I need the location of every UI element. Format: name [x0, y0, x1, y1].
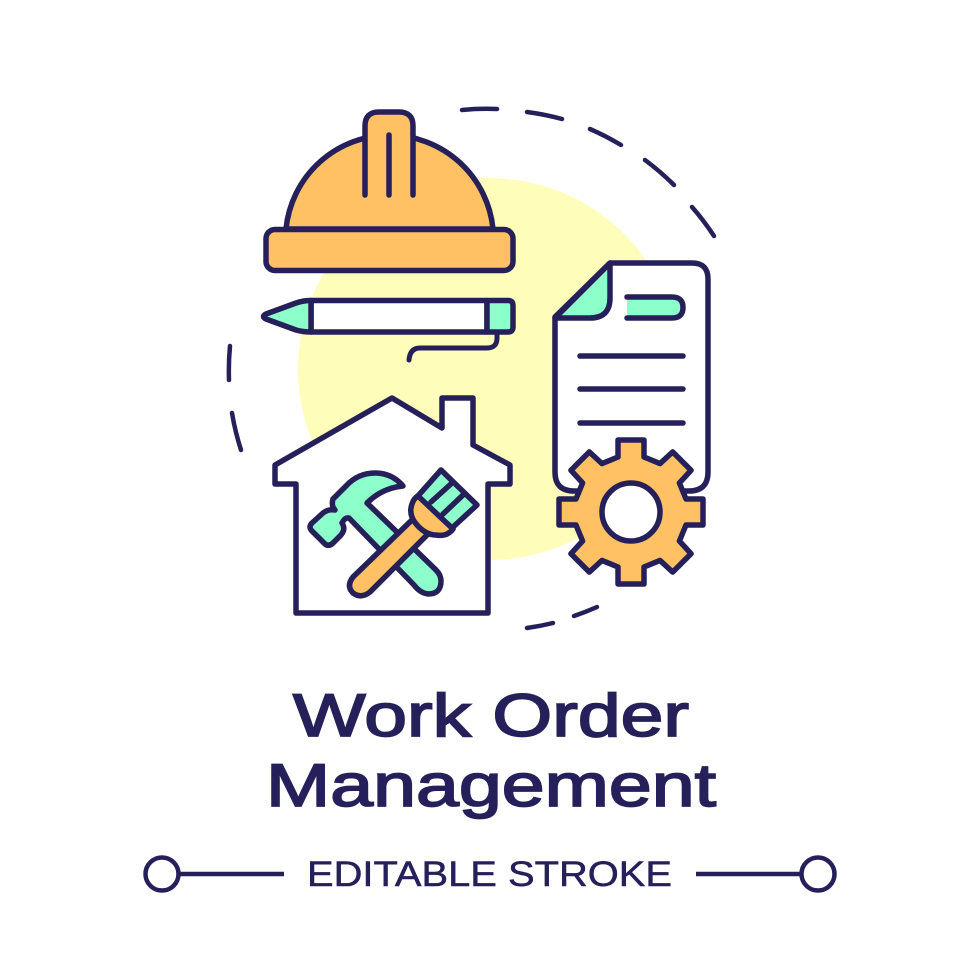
title: Work Order — [293, 682, 689, 749]
footer: editable stroke — [146, 855, 834, 894]
icon: paint brush — [350, 470, 477, 596]
icon: document — [555, 263, 708, 491]
footer: editable stroke: EDITABLE STROKE — [307, 855, 672, 894]
icon: hard hat — [266, 112, 513, 270]
title: Management — [266, 752, 716, 819]
icon: gear — [559, 440, 703, 584]
icon: house — [275, 398, 510, 613]
title — [266, 682, 716, 819]
yellow background circle — [298, 178, 680, 560]
icon: pencil — [264, 300, 513, 360]
dashed ring — [229, 109, 714, 628]
icon: hammer — [310, 473, 441, 594]
